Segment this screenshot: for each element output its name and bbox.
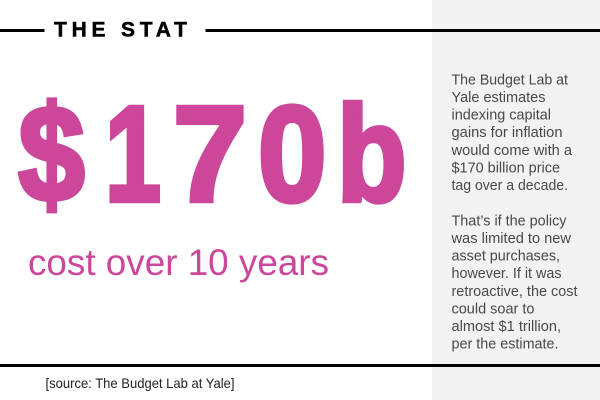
sidebar paragraph one: would come with a — [451, 142, 573, 159]
sidebar paragraph one: gains for inflation — [452, 124, 562, 141]
sidebar paragraph two: per the estimate. — [452, 336, 558, 353]
sidebar paragraph one: The Budget Lab at — [452, 72, 569, 88]
sidebar paragraph two — [451, 212, 578, 353]
big stat: 1 — [105, 78, 161, 230]
sidebar paragraph two: retroactive, the cost — [452, 283, 578, 300]
bottom rule — [0, 364, 600, 367]
sidebar paragraph two: could soar to — [452, 300, 534, 317]
big stat: 7 — [173, 78, 247, 230]
sidebar paragraph one: indexing capital — [452, 107, 551, 124]
sidebar paragraph two: That’s if the policy — [452, 212, 567, 230]
title: THE STAT — [54, 18, 187, 42]
heading rule left — [0, 29, 44, 32]
sidebar paragraph two: asset purchases, — [452, 248, 560, 265]
sidebar paragraph one — [451, 72, 573, 194]
big stat: $ — [18, 78, 84, 230]
big stat: b — [337, 78, 406, 230]
heading rule right — [206, 29, 600, 32]
big stat — [18, 78, 406, 230]
sidebar paragraph one: tag over a decade. — [452, 177, 568, 194]
sidebar paragraph one: Yale estimates — [452, 89, 546, 106]
stat caption: cost over 10 years — [28, 242, 329, 283]
sidebar paragraph one: $170 billion price — [452, 159, 560, 176]
sidebar paragraph two: however. If it was — [452, 265, 562, 282]
panel: grey sidebar — [432, 0, 600, 400]
sidebar paragraph two: almost $1 trillion, — [452, 318, 561, 335]
sidebar paragraph two: was limited to new — [451, 230, 571, 247]
source note: [source: The Budget Lab at Yale] — [46, 375, 234, 391]
big stat: 0 — [258, 78, 326, 230]
